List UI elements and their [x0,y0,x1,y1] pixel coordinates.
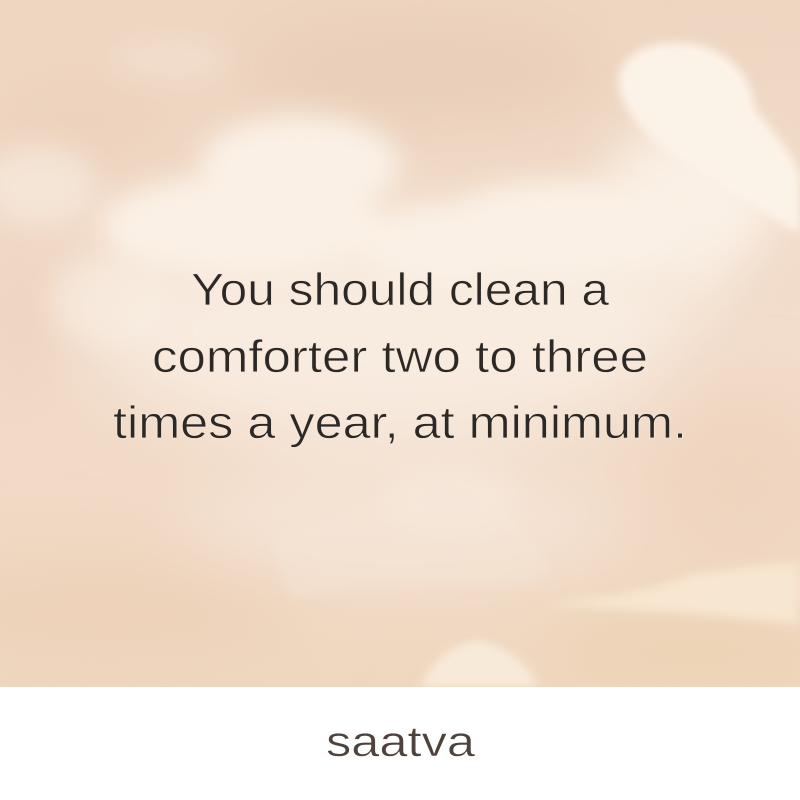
headline text [113,264,687,448]
footer panel [0,687,800,800]
line 1: You should clean a [191,264,610,315]
logo: saatva: saatva [326,718,475,766]
line 2: comforter two to three [152,331,648,382]
line 3: times a year, at minimum. [113,397,687,448]
